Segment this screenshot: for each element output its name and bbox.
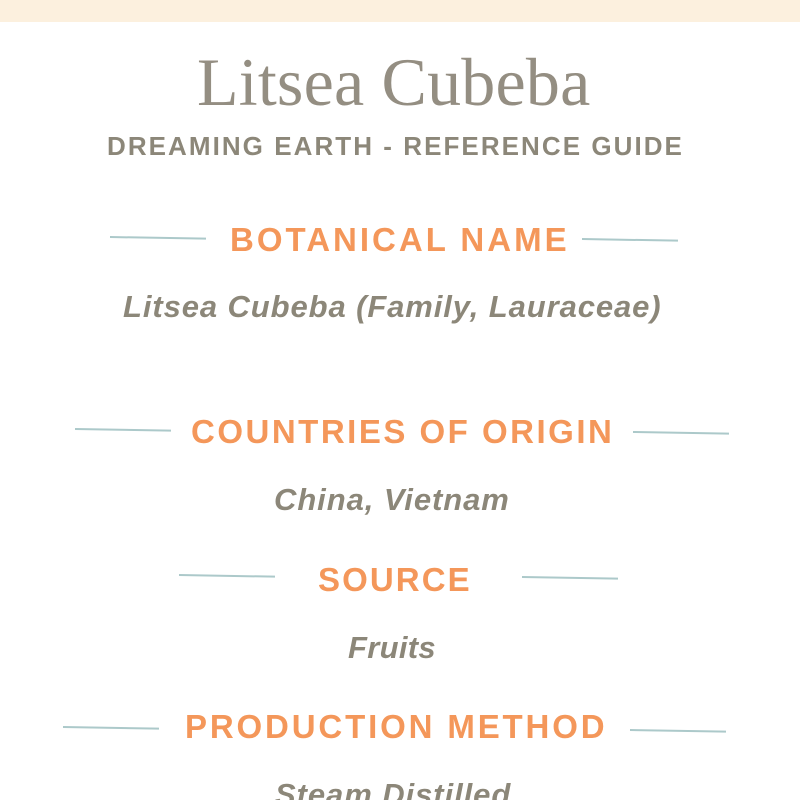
section: countries of origin xyxy=(191,413,614,517)
heading: production method: PRODUCTION METHOD xyxy=(185,708,607,745)
section: botanical name xyxy=(123,221,662,324)
title: Litsea Cubeba xyxy=(197,44,590,120)
top banner xyxy=(0,0,800,22)
value: botanical name: Litsea Cubeba (Family, Lauraceae) xyxy=(123,289,662,324)
section: production method xyxy=(185,708,607,800)
subtitle: DREAMING EARTH - REFERENCE GUIDE xyxy=(107,131,684,161)
section: source xyxy=(318,561,472,665)
heading: source: SOURCE xyxy=(318,561,472,598)
heading: botanical name: BOTANICAL NAME xyxy=(230,221,570,258)
heading: countries of origin: COUNTRIES OF ORIGIN xyxy=(191,413,614,450)
value: countries of origin: China, Vietnam xyxy=(274,482,510,517)
value: source: Fruits xyxy=(348,630,436,665)
